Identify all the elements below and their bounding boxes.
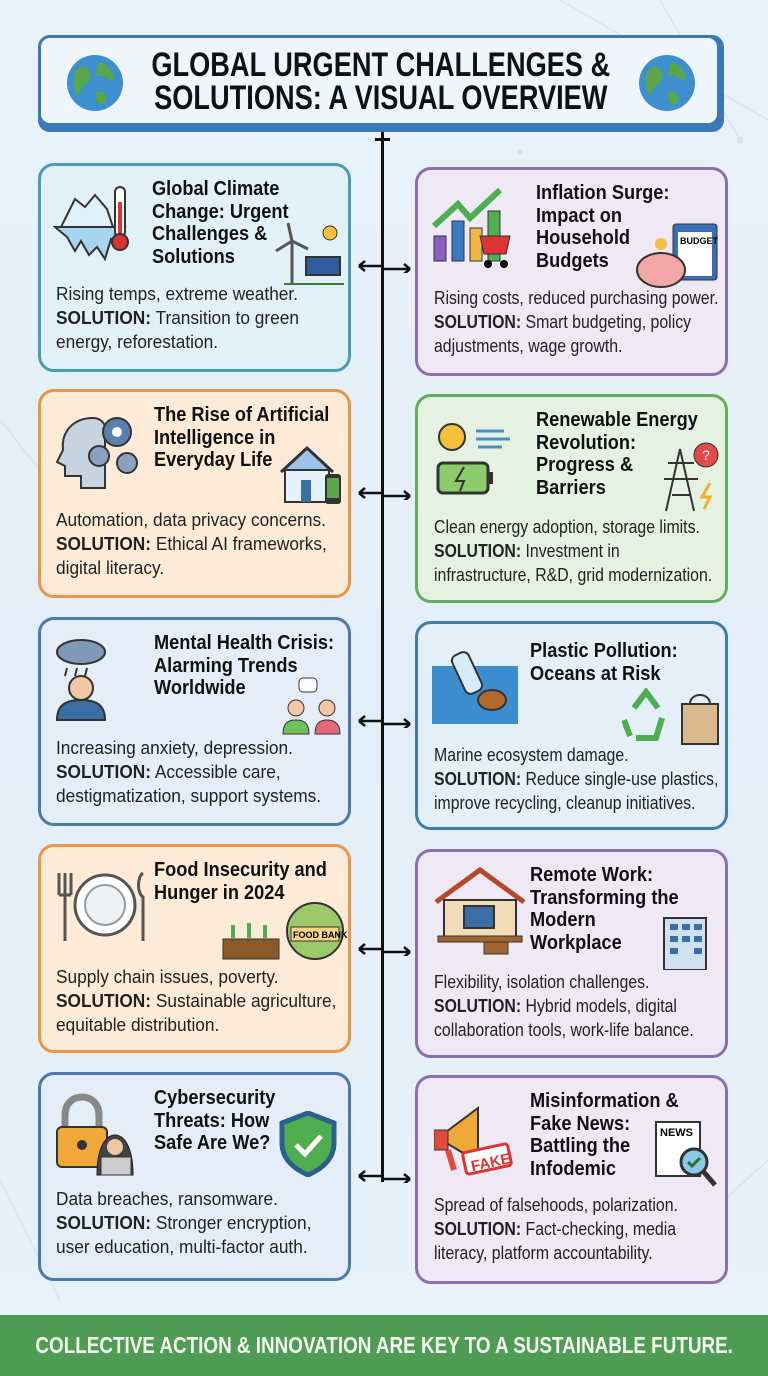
icon: chart and cart	[432, 188, 511, 268]
panel: food insecurity	[38, 844, 351, 1053]
panel: renewable energy: Barriers	[536, 476, 606, 498]
title text: SOLUTIONS: A VISUAL OVERVIEW	[154, 79, 607, 117]
footer banner	[0, 1315, 768, 1376]
icon: piggy bank and budget	[636, 224, 719, 288]
icon: sun wind battery	[436, 423, 510, 494]
panel: inflation: Budgets	[536, 250, 609, 272]
panel: misinformation: Spread of falsehoods, polarization.	[434, 1195, 678, 1215]
panel: inflation: Impact on	[536, 204, 622, 226]
panel: mental health: destigmatization, support systems.	[56, 786, 321, 806]
panel: food insecurity: SOLUTION: Sustainable agriculture,	[56, 991, 336, 1011]
icon: house with desk	[434, 866, 526, 954]
title text	[151, 46, 610, 117]
panel: plastic pollution: improve recycling, cleanup initiatives.	[434, 793, 695, 813]
panel: climate change: Challenges &	[152, 223, 267, 245]
panel: misinformation: SOLUTION: Fact-checking, media	[434, 1219, 676, 1239]
panel: misinformation	[415, 1075, 728, 1284]
panel: mental health: Increasing anxiety, depression.	[56, 738, 293, 758]
panel: remote work: Flexibility, isolation challenges.	[434, 972, 649, 992]
panel: climate change: Rising temps, extreme weather.	[56, 284, 298, 304]
panel: cybersecurity: Data breaches, ransomware.	[56, 1189, 278, 1209]
panel: remote work	[415, 849, 728, 1058]
icon: farm and food bank	[222, 902, 347, 960]
panel: mental health: Worldwide	[154, 677, 246, 699]
icon: recycle and bag	[622, 688, 719, 745]
panel: artificial intelligence: Automation, data privacy concerns.	[56, 510, 326, 530]
panel: renewable energy	[415, 394, 728, 603]
panel: food insecurity: Hunger in 2024	[154, 882, 284, 904]
panel: climate change: Solutions	[152, 246, 235, 268]
icon: newspaper and magnifier	[655, 1121, 717, 1187]
icon: AI head with gears	[56, 417, 138, 489]
icon: plate and cutlery	[58, 872, 144, 941]
panel: cybersecurity	[38, 1072, 351, 1281]
panel: plastic pollution	[415, 621, 728, 830]
panel: climate change	[38, 163, 351, 372]
panel: cybersecurity: user education, multi-factor auth.	[56, 1237, 308, 1257]
panel: climate change: energy, reforestation.	[56, 332, 218, 352]
panel: climate change: SOLUTION: Transition to green	[56, 308, 299, 328]
icon: padlock and hacker	[56, 1094, 134, 1176]
panel: remote work: Workplace	[530, 932, 622, 954]
panel: inflation: SOLUTION: Smart budgeting, policy	[434, 312, 691, 332]
title text: GLOBAL URGENT CHALLENGES &	[151, 46, 610, 84]
icon: megaphone fake stamp: FAKE	[470, 1150, 512, 1175]
panel: inflation	[415, 167, 728, 376]
panel: plastic pollution: Oceans at Risk	[530, 662, 661, 684]
arrow 2	[358, 487, 411, 500]
panel: remote work: collaboration tools, work-life balance.	[434, 1020, 694, 1040]
icon: person under rain cloud	[56, 639, 106, 721]
icon: wind turbine and solar	[275, 222, 344, 285]
icon: iceberg and thermometer	[53, 186, 129, 262]
panel: food insecurity: equitable distribution.	[56, 1015, 219, 1035]
panel: remote work: SOLUTION: Hybrid models, digital	[434, 996, 677, 1016]
panel: plastic pollution: SOLUTION: Reduce single-use plastics,	[434, 769, 718, 789]
panel: artificial intelligence: The Rise of Artificial	[154, 404, 329, 426]
panel: renewable energy: Renewable Energy	[536, 409, 698, 431]
panel: mental health	[38, 617, 351, 826]
panel: misinformation: Infodemic	[530, 1158, 616, 1180]
icon: globe right	[639, 55, 695, 111]
panel: food insecurity: Food Insecurity and	[154, 859, 327, 881]
title banner	[38, 35, 724, 132]
panel: cybersecurity: Threats: How	[154, 1110, 269, 1132]
icon: two people talking	[282, 678, 340, 734]
panel: remote work: Transforming the	[530, 886, 679, 908]
icon: megaphone fake stamp	[434, 1106, 513, 1176]
panel: artificial intelligence: Intelligence in	[154, 426, 275, 448]
arrows	[358, 260, 411, 273]
icon: piggy bank and budget: BUDGET	[680, 236, 719, 246]
timeline spine	[381, 132, 384, 1182]
panel: inflation: adjustments, wage growth.	[434, 336, 622, 356]
panel: artificial intelligence: digital literacy.	[56, 558, 164, 578]
panel: food insecurity: Supply chain issues, poverty.	[56, 967, 279, 987]
panel: cybersecurity: Safe Are We?	[154, 1132, 270, 1154]
panel: inflation: Rising costs, reduced purchasing power.	[434, 288, 718, 308]
panel: artificial intelligence	[38, 389, 351, 598]
footer text: COLLECTIVE ACTION & INNOVATION ARE KEY TO A SUSTAINABLE FUTURE.	[35, 1332, 733, 1358]
panel: mental health: Alarming Trends	[154, 654, 298, 676]
panel: cybersecurity: Cybersecurity	[154, 1087, 275, 1109]
icon: office building	[663, 917, 707, 970]
icon: power tower: ?	[702, 447, 710, 463]
panel: renewable energy: infrastructure, R&D, grid modernization.	[434, 565, 712, 585]
icon: smart house	[280, 446, 341, 504]
panel: artificial intelligence: SOLUTION: Ethical AI frameworks,	[56, 534, 327, 554]
icon: globe left	[67, 55, 123, 111]
panel: misinformation: literacy, platform accountability.	[434, 1243, 653, 1263]
panel: renewable energy: Progress &	[536, 454, 633, 476]
icon: shield check	[280, 1111, 336, 1177]
panel: inflation: Household	[536, 227, 630, 249]
arrow 5	[358, 1170, 411, 1183]
panel: inflation: Inflation Surge:	[536, 182, 669, 204]
panel: climate change: Change: Urgent	[152, 200, 288, 222]
panel: remote work: Modern	[530, 909, 596, 931]
panel: misinformation: Fake News:	[530, 1112, 630, 1134]
panel: climate change: Global Climate	[152, 178, 279, 200]
panel: misinformation: Battling the	[530, 1135, 630, 1157]
panel: cybersecurity: SOLUTION: Stronger encryption,	[56, 1213, 311, 1233]
panel: renewable energy: Clean energy adoption, storage limits.	[434, 517, 700, 537]
panel: remote work: Remote Work:	[530, 864, 653, 886]
panel: misinformation: Misinformation &	[530, 1090, 679, 1112]
icon: farm and food bank: FOOD BANK	[293, 930, 347, 940]
panel: artificial intelligence: Everyday Life	[154, 449, 272, 471]
panel: plastic pollution: Plastic Pollution:	[530, 640, 678, 662]
panel: mental health: SOLUTION: Accessible care,	[56, 762, 281, 782]
arrow 3	[358, 715, 411, 728]
panel: mental health: Mental Health Crisis:	[154, 632, 334, 654]
panel: renewable energy: Revolution:	[536, 432, 636, 454]
panel: plastic pollution: Marine ecosystem damage.	[434, 745, 629, 765]
icon: power tower	[664, 442, 718, 512]
icon: newspaper and magnifier: NEWS	[660, 1127, 693, 1139]
panel: renewable energy: SOLUTION: Investment in	[434, 541, 620, 561]
icon: ocean bottle turtle	[432, 651, 518, 724]
arrow 4	[358, 943, 411, 956]
